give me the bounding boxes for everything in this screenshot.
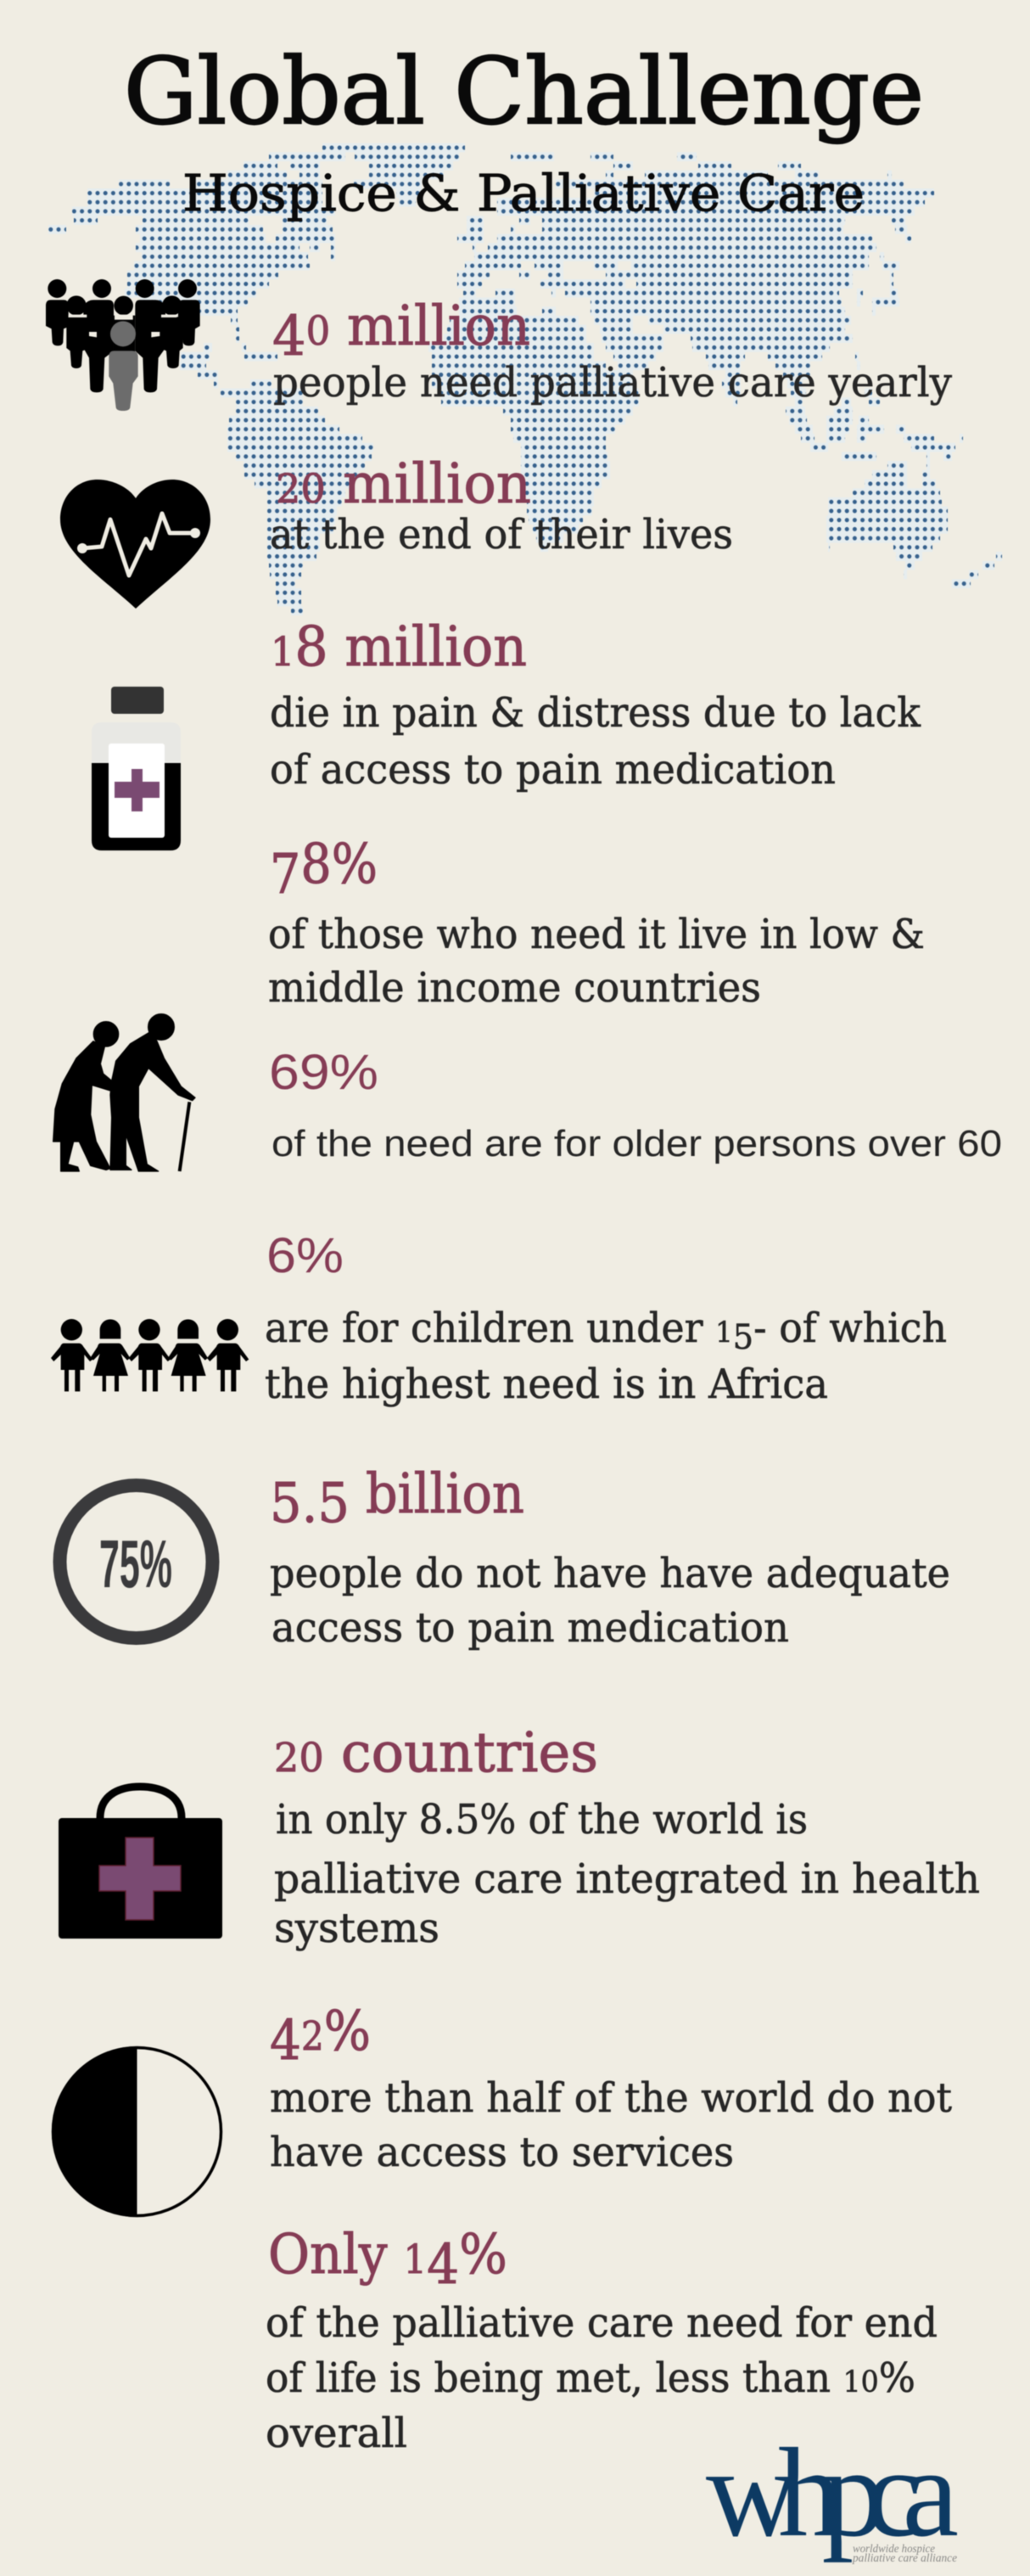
stat: 5.5 billion: people do not have have adequate (270, 1550, 950, 1597)
stat: 20 countries (274, 1721, 980, 1952)
stat: 18 million: die in pain & distress due to lack (270, 689, 921, 737)
stat: 18 million (270, 615, 921, 794)
stat: 5.5 billion (270, 1462, 950, 1652)
stat: 20 countries: in only 8.5% of the world is (276, 1796, 808, 1844)
stat: 78%: of those who need it live in low & (268, 911, 925, 958)
stat: 18 million: of access to pain medication (270, 746, 836, 794)
stat: only 14% (266, 2223, 938, 2457)
stat: 69%: 69% (269, 1045, 378, 1100)
stat: 69%: of the need are for older persons over 60 (271, 1123, 1002, 1165)
icon: elderly couple (53, 1014, 195, 1171)
stat: 6%: 6% (266, 1228, 344, 1283)
stat: 20 million: at the end of their lives (270, 511, 733, 558)
stat: 6%: 5 (733, 1318, 753, 1357)
stat: 6%: are for children under 1 (265, 1305, 734, 1352)
icon: medicine bottle (92, 687, 181, 850)
stat: 69% (269, 1045, 1002, 1165)
stat: 78%: 8% (300, 833, 378, 896)
icon: half-filled circle (52, 2046, 221, 2217)
subtitle: Hospice & Palliative Care (182, 164, 865, 222)
stat: 5.5 billion: 5.5 (270, 1472, 350, 1535)
stat: only 14%: of life is being met, less than 10% (266, 2354, 915, 2402)
title: Global Challenge (124, 39, 924, 145)
icon: 75% ring (59, 1485, 212, 1638)
stat: 42%: 4 (270, 2009, 301, 2073)
stat: 78% (268, 833, 925, 1012)
icon: heart with pulse (60, 480, 210, 609)
stat: 6% (265, 1228, 947, 1408)
stat: 40 million (272, 295, 952, 407)
logo: whpca: palliative care alliance (852, 2552, 957, 2565)
stat: 40 million: million (348, 295, 540, 358)
stat: 20 countries: systems (274, 1905, 439, 1952)
stat: 78%: middle income countries (268, 964, 761, 1012)
stat: 42%: more than half of the world do not (270, 2074, 952, 2122)
stat: 6%: - of which (753, 1305, 947, 1352)
stat: 20 million (270, 452, 733, 558)
stat: 20 countries: 20 countries (274, 1721, 598, 1785)
icon: row of children (51, 1319, 249, 1391)
icon: 75% ring: 75% (99, 1526, 172, 1602)
stat: only 14%: of the palliative care need for end (266, 2299, 938, 2347)
stat: 5.5 billion: billion (350, 1462, 524, 1526)
stat: 42%: 2 (301, 2013, 324, 2060)
stat: 18 million: 18 million (271, 615, 527, 679)
stat: only 14%: Only 1 (268, 2223, 428, 2287)
logo: whpca: whpca (706, 2422, 959, 2563)
stat: 40 million: 0 (306, 308, 330, 355)
stat: only 14%: % (459, 2223, 507, 2287)
stat: 78%: 7 (270, 843, 300, 906)
stat: 42% (270, 2000, 952, 2176)
stat: 5.5 billion: access to pain medication (271, 1604, 789, 1652)
stat: 20 million: 20 million (276, 452, 531, 516)
stat: 20 countries: palliative care integrated in health (274, 1855, 980, 1903)
dotted world map (48, 148, 1002, 611)
icon: medical bag (59, 1787, 222, 1939)
logo: whpca: worldwide hospice (853, 2543, 935, 2556)
stat: 6%: the highest need is in Africa (265, 1361, 828, 1408)
icon: crowd of people (46, 279, 200, 411)
stat: 40 million: 4 (272, 305, 306, 368)
stat: only 14%: overall (266, 2410, 407, 2457)
stat: 40 million: people need palliative care yearly (273, 359, 952, 407)
stat: only 14%: 4 (427, 2233, 459, 2297)
stat: 42%: % (324, 2000, 377, 2063)
stat: 42%: have access to services (270, 2129, 734, 2176)
